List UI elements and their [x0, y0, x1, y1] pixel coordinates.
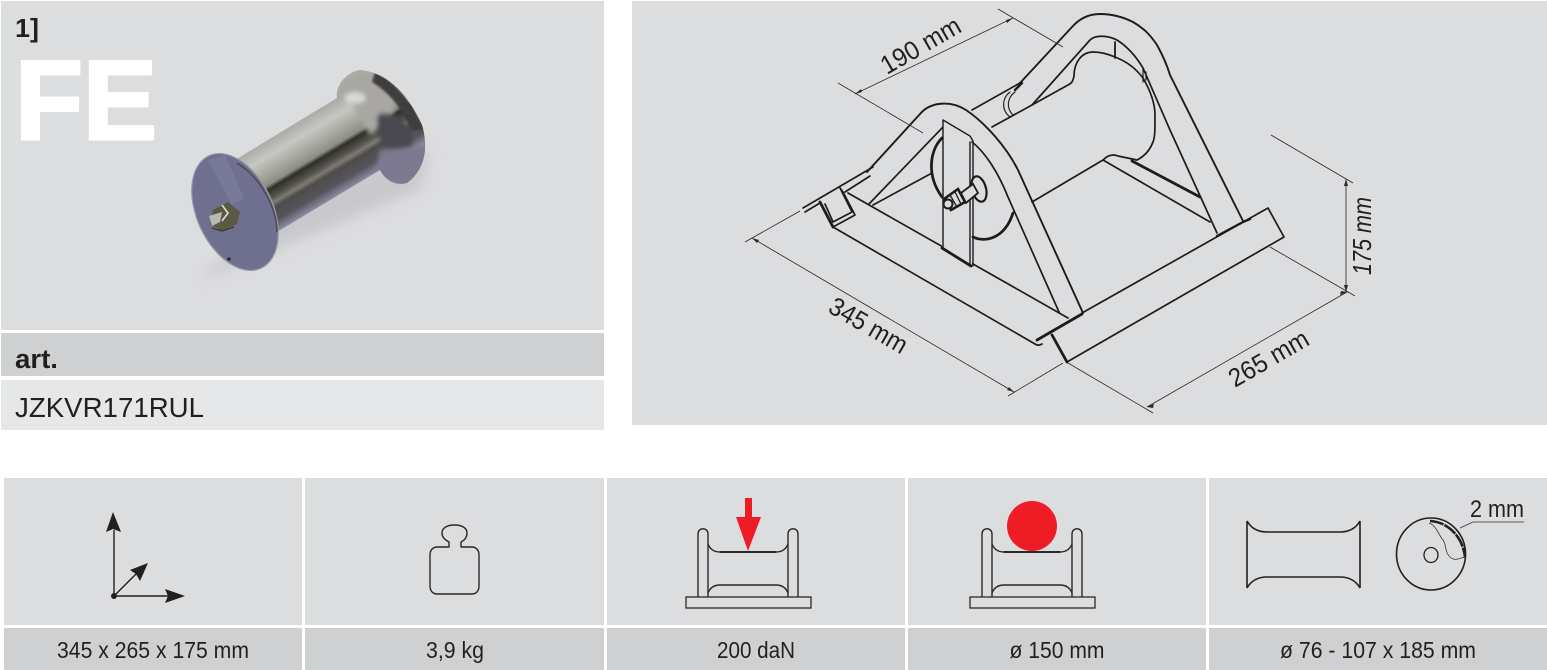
icon: roller stand with cable	[970, 501, 1095, 608]
icon: axes arrows	[106, 512, 185, 603]
spec: cable diameter: ø 150 mm	[1010, 637, 1104, 663]
red cable circle	[1007, 501, 1057, 551]
roller stand line drawing	[803, 14, 1284, 362]
icon: weight	[430, 525, 479, 594]
left flange	[803, 167, 873, 212]
icon: roller stand with load arrow	[686, 498, 811, 608]
spec: weight	[305, 478, 604, 670]
rear arch	[1020, 14, 1243, 221]
dimension 190 mm: 190 mm	[875, 10, 966, 80]
front arch	[867, 104, 1083, 313]
dimension 190 mm	[838, 9, 1063, 133]
icon: roller end view: 2 mm	[1470, 496, 1524, 523]
dimension 265 mm	[1068, 247, 1355, 413]
spec: dimensions: 345 x 265 x 175 mm	[57, 637, 249, 663]
spec: roller size	[1209, 478, 1547, 670]
icon: roller side view	[1247, 521, 1360, 588]
spec: load capacity: 200 daN	[717, 637, 795, 663]
item number: 1]	[15, 13, 39, 43]
base plate	[833, 193, 1284, 362]
panel: product photo	[1, 1, 604, 330]
bolt	[209, 202, 240, 231]
article header row	[1, 333, 604, 376]
article code row	[1, 380, 604, 430]
dimension 175 mm	[752, 18, 1377, 408]
red load arrow	[736, 498, 761, 551]
spool disc	[931, 138, 1013, 239]
spec: load capacity	[607, 478, 905, 670]
dimension 175 mm: 175 mm	[1347, 197, 1377, 275]
icon: roller end view	[1396, 496, 1524, 590]
spec: roller size: ø 76 - 107 x 185 mm	[1280, 637, 1476, 663]
rear base	[1032, 155, 1210, 222]
dimension 265 mm: 265 mm	[1223, 323, 1314, 393]
article header row: art.	[15, 344, 58, 374]
panel: technical drawing	[632, 1, 1547, 425]
spec: cable diameter	[908, 478, 1206, 670]
spec: dimensions	[4, 478, 302, 670]
rear spool	[972, 52, 1155, 160]
dimension 345 mm: 345 mm	[824, 291, 913, 360]
material code FE: FE	[15, 38, 157, 163]
hub and bolt	[944, 175, 989, 210]
front plate	[942, 120, 972, 267]
spec: weight: 3,9 kg	[426, 637, 484, 663]
dimension 345 mm	[745, 211, 1063, 396]
photo: steel roller	[191, 70, 428, 272]
article code row: JZKVR171RUL	[15, 392, 204, 423]
